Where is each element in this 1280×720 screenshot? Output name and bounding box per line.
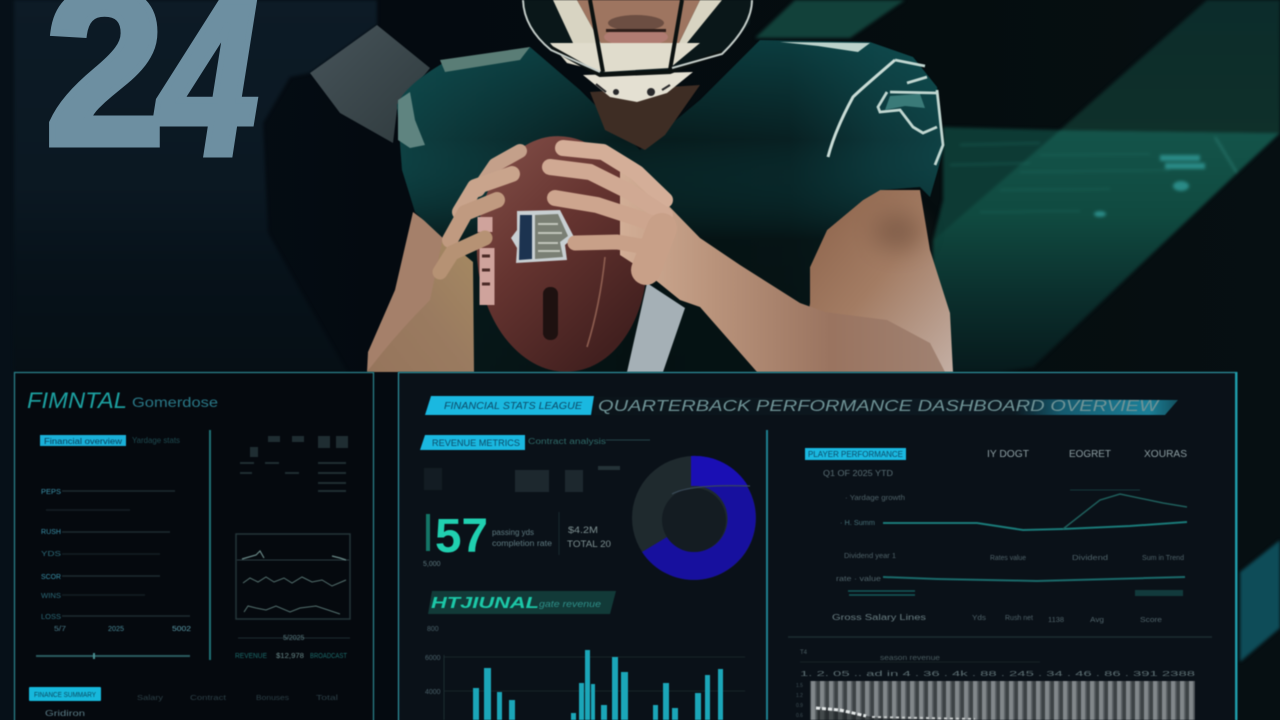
second ribbon: Contract analysis: [528, 437, 606, 446]
big metric 57: $4.2M: [568, 525, 598, 535]
cyan label: [805, 448, 906, 460]
football: [469, 130, 655, 378]
bottom column labels: [137, 695, 339, 702]
main panel: dashboard: [398, 372, 1238, 720]
chart legend: BROADCAST: [310, 653, 348, 660]
cyan bottom tag: [29, 687, 101, 718]
horizontal bar rows: RUSH: [41, 529, 61, 536]
bottom column labels: Bonuses: [256, 695, 290, 702]
dense stripe chart: 1.5: [796, 683, 803, 689]
vertical divider: [209, 430, 211, 660]
bottom column labels: Total: [316, 695, 339, 702]
cyan label tag: Financial overview: [44, 437, 122, 446]
mid row labels: Rush net: [1005, 615, 1033, 622]
horizontal bar rows: LOSS: [41, 614, 61, 621]
sleeve stripe and patches: [828, 60, 895, 157]
main panel divider: [766, 430, 768, 720]
cyan bottom tag: Gridiron: [45, 709, 85, 718]
neck skin: [590, 85, 700, 150]
right face pad: [677, 0, 722, 47]
row labels: Dividend: [1072, 555, 1108, 562]
big metric 57: 57: [435, 510, 488, 563]
right chart section: EOGRET: [1069, 449, 1111, 460]
panel subtitle: Gomerdose: [132, 394, 218, 410]
chin cup: [583, 72, 693, 102]
header ribbon: QUARTERBACK PERFORMANCE DASHBOARD OVERVIEW: [598, 398, 1160, 415]
dense stripe chart: T4: [800, 650, 808, 656]
third ribbon: HTJIUNAL: [431, 595, 539, 612]
mid row labels: Gross Salary Lines: [832, 613, 926, 622]
helmet shell: [522, 0, 752, 73]
horizontal bar rows: 2025: [108, 626, 124, 633]
bar chart: [425, 626, 745, 720]
chart legend: [235, 635, 350, 660]
horizontal bar rows: 5/7: [54, 626, 66, 633]
bicep right: [800, 190, 953, 372]
row labels: Rates value: [990, 555, 1026, 562]
patch fill: [885, 94, 925, 110]
laces: [485, 217, 487, 305]
face cage: [550, 0, 722, 75]
mid row labels: [832, 613, 1162, 624]
chart legend: 5/2025: [283, 635, 305, 642]
right eagle patch: [878, 60, 943, 165]
jersey shoulder trim: [440, 47, 530, 72]
dense stripe chart: season revenue: [880, 655, 940, 662]
seam: [543, 287, 558, 340]
mid row labels: Score: [1140, 617, 1162, 624]
big metric 57: [423, 510, 611, 568]
header ribbon: [425, 396, 1178, 415]
bottom column labels: Salary: [137, 695, 164, 702]
helmet: [522, 0, 752, 102]
jersey number 24: [45, 0, 258, 202]
row labels: · H. Summ: [840, 520, 875, 527]
bicep shadow: [874, 214, 922, 250]
mini line charts: [236, 534, 350, 619]
mid row labels: Yds: [972, 615, 987, 622]
dense stripe chart: 0.6: [796, 713, 803, 719]
donut chart: [632, 456, 756, 580]
dense stripe chart: 1. 2. 05 .. ad in 4 . 36 . 4k . 88 . 245 . 34 . 46 . 86 . 391 2388: [800, 671, 1195, 678]
left upper arm: [367, 212, 445, 372]
chart legend: $12,978: [276, 653, 304, 660]
row labels: · Yardage growth: [845, 495, 905, 502]
right shoulder trim: [780, 42, 870, 52]
bar chart: 800: [427, 626, 439, 633]
small faint labels: [424, 466, 620, 492]
cage highlight: [523, 0, 752, 72]
horizontal bar rows: PEPS: [41, 489, 61, 496]
line charts: [848, 490, 1187, 596]
bar chart: 4000: [425, 689, 441, 696]
second ribbon: REVENUE METRICS: [432, 438, 520, 448]
mid row labels: 1138: [1048, 617, 1064, 624]
header ribbon: FINANCIAL STATS LEAGUE: [444, 401, 582, 412]
seam line: [587, 257, 605, 347]
dense stripe chart: 0.9: [796, 703, 803, 709]
right chart section: Q1 OF 2025 YTD: [823, 469, 893, 478]
badge lines: [538, 224, 562, 251]
third ribbon: gate revenue: [539, 599, 601, 609]
face skin: [577, 0, 700, 47]
right chart section: [788, 448, 1212, 720]
slider line: [36, 653, 190, 659]
left panel: financial overview: [14, 372, 374, 720]
big metric 57: passing yds: [492, 528, 534, 537]
chart legend: REVENUE: [235, 653, 267, 660]
third ribbon: [428, 591, 616, 614]
right chart section: PLAYER PERFORMANCE: [808, 450, 903, 459]
chin strap: [550, 43, 700, 72]
left face pad: [553, 0, 603, 47]
light gap below ball: [627, 283, 685, 372]
cyan label tag: [40, 435, 180, 446]
cyan label tag: Yardage stats: [132, 436, 180, 445]
dark torso: [14, 0, 377, 372]
row labels: [836, 495, 1184, 583]
big metric 57: TOTAL 20: [567, 539, 611, 549]
gray sleeve: [310, 25, 430, 143]
horizontal bar rows: [41, 489, 191, 633]
ball badge: [511, 210, 574, 263]
horizontal bar rows: SCOR: [41, 574, 61, 581]
panel title: FIMNTAL: [27, 388, 127, 413]
horizontal bar rows: 5002: [172, 626, 191, 633]
data table: [240, 436, 348, 492]
main player with football: [367, 0, 953, 378]
left background player in dark jersey number 24: [14, 0, 430, 372]
badge blue strip: [519, 215, 532, 260]
bottom column labels: Contract: [190, 695, 226, 702]
dense stripe chart: 1.2: [796, 693, 803, 699]
big metric 57: completion rate: [492, 539, 553, 548]
cyan bottom tag: FINANCE SUMMARY: [34, 692, 96, 699]
row labels: Dividend year 1: [844, 553, 896, 560]
left sleeve patch: [398, 92, 425, 148]
horizontal bar rows: WINS: [41, 593, 61, 600]
green diagonal stripes backdrop: [755, 0, 1280, 662]
column headings: IY DOGT: [987, 449, 1029, 460]
mid row labels: Avg: [1090, 617, 1104, 624]
horizontal bar rows: YDS: [41, 551, 61, 558]
lace gaps: [482, 256, 490, 284]
badge grey field: [535, 214, 568, 259]
big metric 57: 5,000: [423, 561, 441, 568]
second ribbon: [420, 435, 650, 450]
mouth: [604, 15, 668, 46]
jersey: [397, 40, 944, 372]
left hand: [367, 151, 520, 372]
right hand and forearm: [550, 148, 945, 372]
row labels: rate · value: [836, 576, 881, 583]
row labels: Sum in Trend: [1142, 555, 1184, 562]
dense stripe chart: [796, 650, 1195, 720]
right chart section: XOURAS: [1144, 449, 1187, 460]
field streaks and markings: [950, 143, 1170, 212]
jersey shading: [397, 40, 944, 372]
bar chart: 6000: [425, 655, 441, 662]
